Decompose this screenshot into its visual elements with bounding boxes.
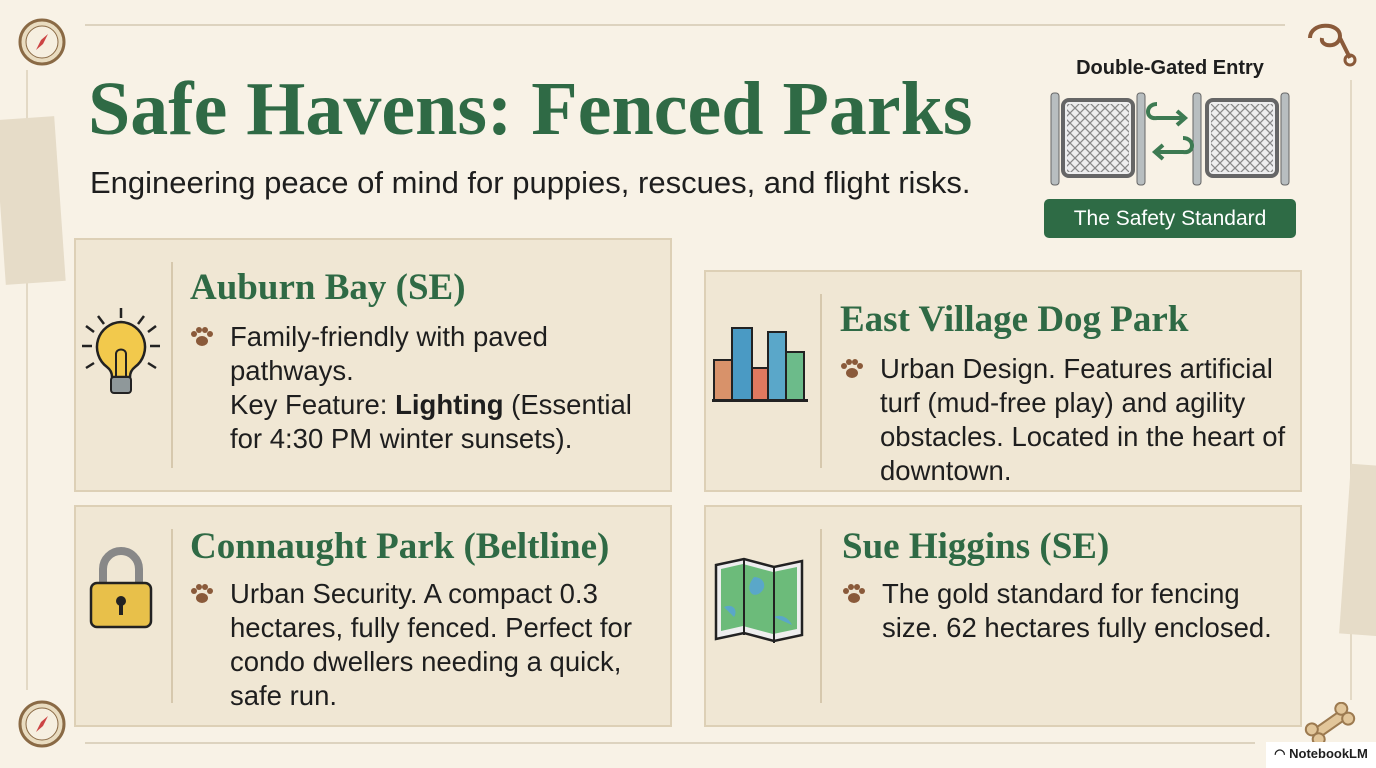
- heading: Connaught Park (Beltline): [190, 526, 609, 567]
- text: [191, 321, 632, 454]
- text: size. 62 hectares fully enclosed.: [882, 612, 1272, 643]
- heading: Auburn Bay (SE): [190, 267, 466, 308]
- icon: city: [712, 327, 808, 402]
- subtitle: Engineering peace of mind for puppies, rescues, and flight risks.: [90, 165, 971, 200]
- text: Family-friendly with paved: [230, 321, 548, 352]
- text: Key Feature: Lighting (Essential: [230, 389, 632, 420]
- heading: Sue Higgins (SE): [842, 526, 1109, 567]
- icon: map: [714, 558, 804, 643]
- callout heading: Double-Gated Entry: [1076, 57, 1264, 79]
- footer logo: ◠ NotebookLM: [1274, 746, 1368, 761]
- text: pathways.: [230, 355, 354, 386]
- text: [191, 578, 632, 711]
- decorative tape left: [0, 116, 66, 285]
- icon: compass bottom: [18, 700, 66, 748]
- text: Urban Design. Features artificial: [880, 353, 1273, 384]
- badge: The Safety Standard: [1074, 207, 1266, 230]
- title: Safe Havens: Fenced Parks: [88, 67, 972, 151]
- icon: padlock: [90, 547, 152, 628]
- icon: leash: [1308, 24, 1356, 66]
- text: [843, 578, 1272, 643]
- text: Urban Security. A compact 0.3: [230, 578, 598, 609]
- text: turf (mud-free play) and agility: [880, 387, 1245, 418]
- text: condo dwellers needing a quick,: [230, 646, 621, 677]
- icon: lightbulb: [82, 308, 160, 394]
- heading: East Village Dog Park: [840, 299, 1188, 340]
- callout: double-gated entry: [1044, 57, 1296, 238]
- panel: East Village: [704, 270, 1302, 492]
- icon: gates: [1050, 92, 1290, 186]
- text: hectares, fully fenced. Perfect for: [230, 612, 632, 643]
- panel: Auburn Bay: [74, 238, 672, 492]
- footer logo: [1266, 742, 1376, 768]
- icon: compass top: [18, 18, 66, 66]
- badge: [1044, 199, 1296, 238]
- text: obstacles. Located in the heart of: [880, 421, 1285, 452]
- panel: Connaught Park: [74, 505, 672, 727]
- panel: Sue Higgins: [704, 505, 1302, 727]
- text: [841, 353, 1286, 486]
- text: safe run.: [230, 680, 337, 711]
- text: for 4:30 PM winter sunsets).: [230, 423, 572, 454]
- text: The gold standard for fencing: [882, 578, 1240, 609]
- text: downtown.: [880, 455, 1011, 486]
- icon: bone: [1304, 702, 1356, 742]
- decorative tape right: [1339, 464, 1376, 636]
